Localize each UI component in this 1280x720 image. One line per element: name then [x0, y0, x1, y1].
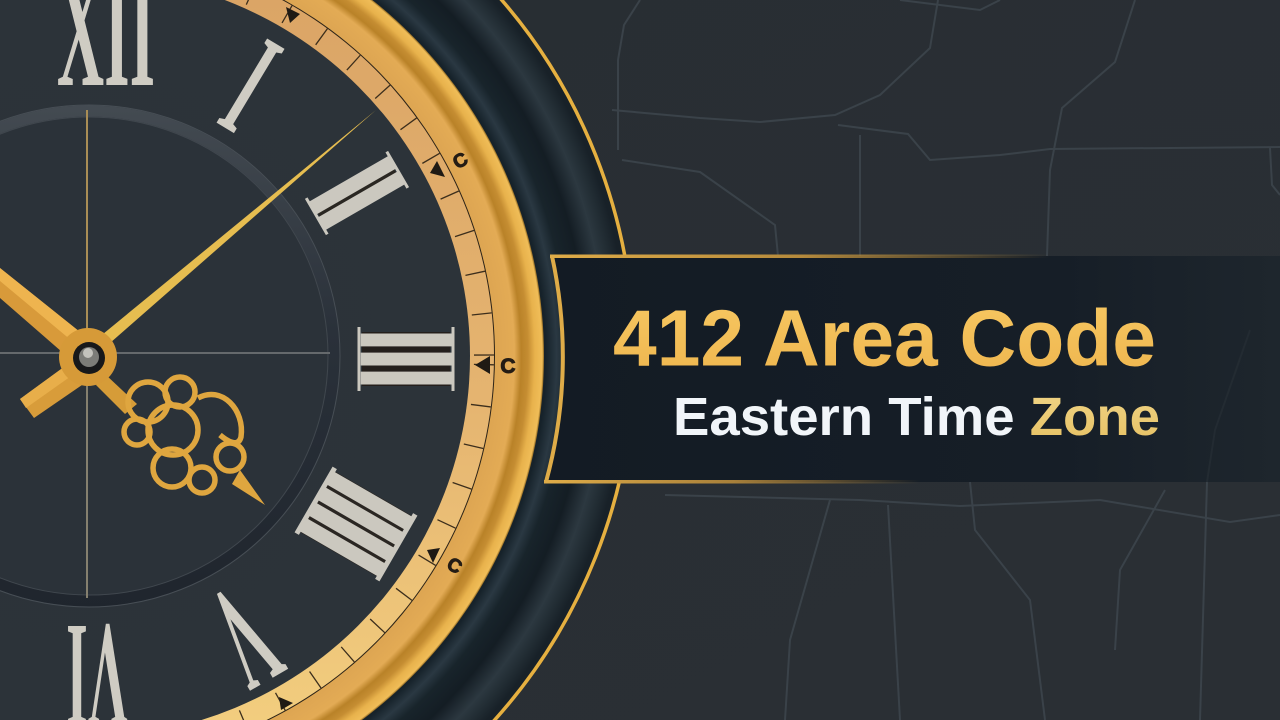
minute track ticks [238, 0, 494, 720]
banner top gold edge [550, 254, 1050, 258]
hub [59, 328, 117, 386]
clock [0, 0, 634, 720]
numeral I: I [198, 6, 305, 162]
clock face [0, 0, 470, 720]
gold ring [269, 0, 544, 720]
numeral V: V [184, 555, 307, 720]
hand: thin second hand [103, 110, 376, 343]
hand: thick minute hand [0, 268, 80, 352]
track markers [279, 7, 490, 710]
hand: tail [20, 364, 82, 418]
hand: ornate hour hand [96, 375, 265, 505]
banner [544, 254, 1280, 484]
subtitle: Eastern Time Zone [673, 387, 1160, 447]
numeral III: III [336, 330, 475, 388]
track letters [443, 149, 516, 579]
numeral IIII: IIII [280, 459, 431, 588]
track letters: C [450, 149, 472, 174]
track letters: C [443, 554, 466, 579]
title: 412 Area Code [613, 294, 1156, 382]
track letters: C [500, 355, 516, 378]
numeral II: II [290, 144, 423, 242]
crosshair lines [0, 110, 330, 598]
numeral III [358, 327, 454, 391]
map lines background [612, 0, 1280, 720]
banner bottom gold edge [544, 480, 920, 484]
banner left gold edge [546, 256, 563, 482]
dark bezel with outer gold line [362, 0, 626, 720]
numeral II [305, 151, 409, 235]
minute track [266, 0, 495, 720]
inner dial [0, 111, 334, 601]
banner faint map line [1207, 330, 1250, 482]
